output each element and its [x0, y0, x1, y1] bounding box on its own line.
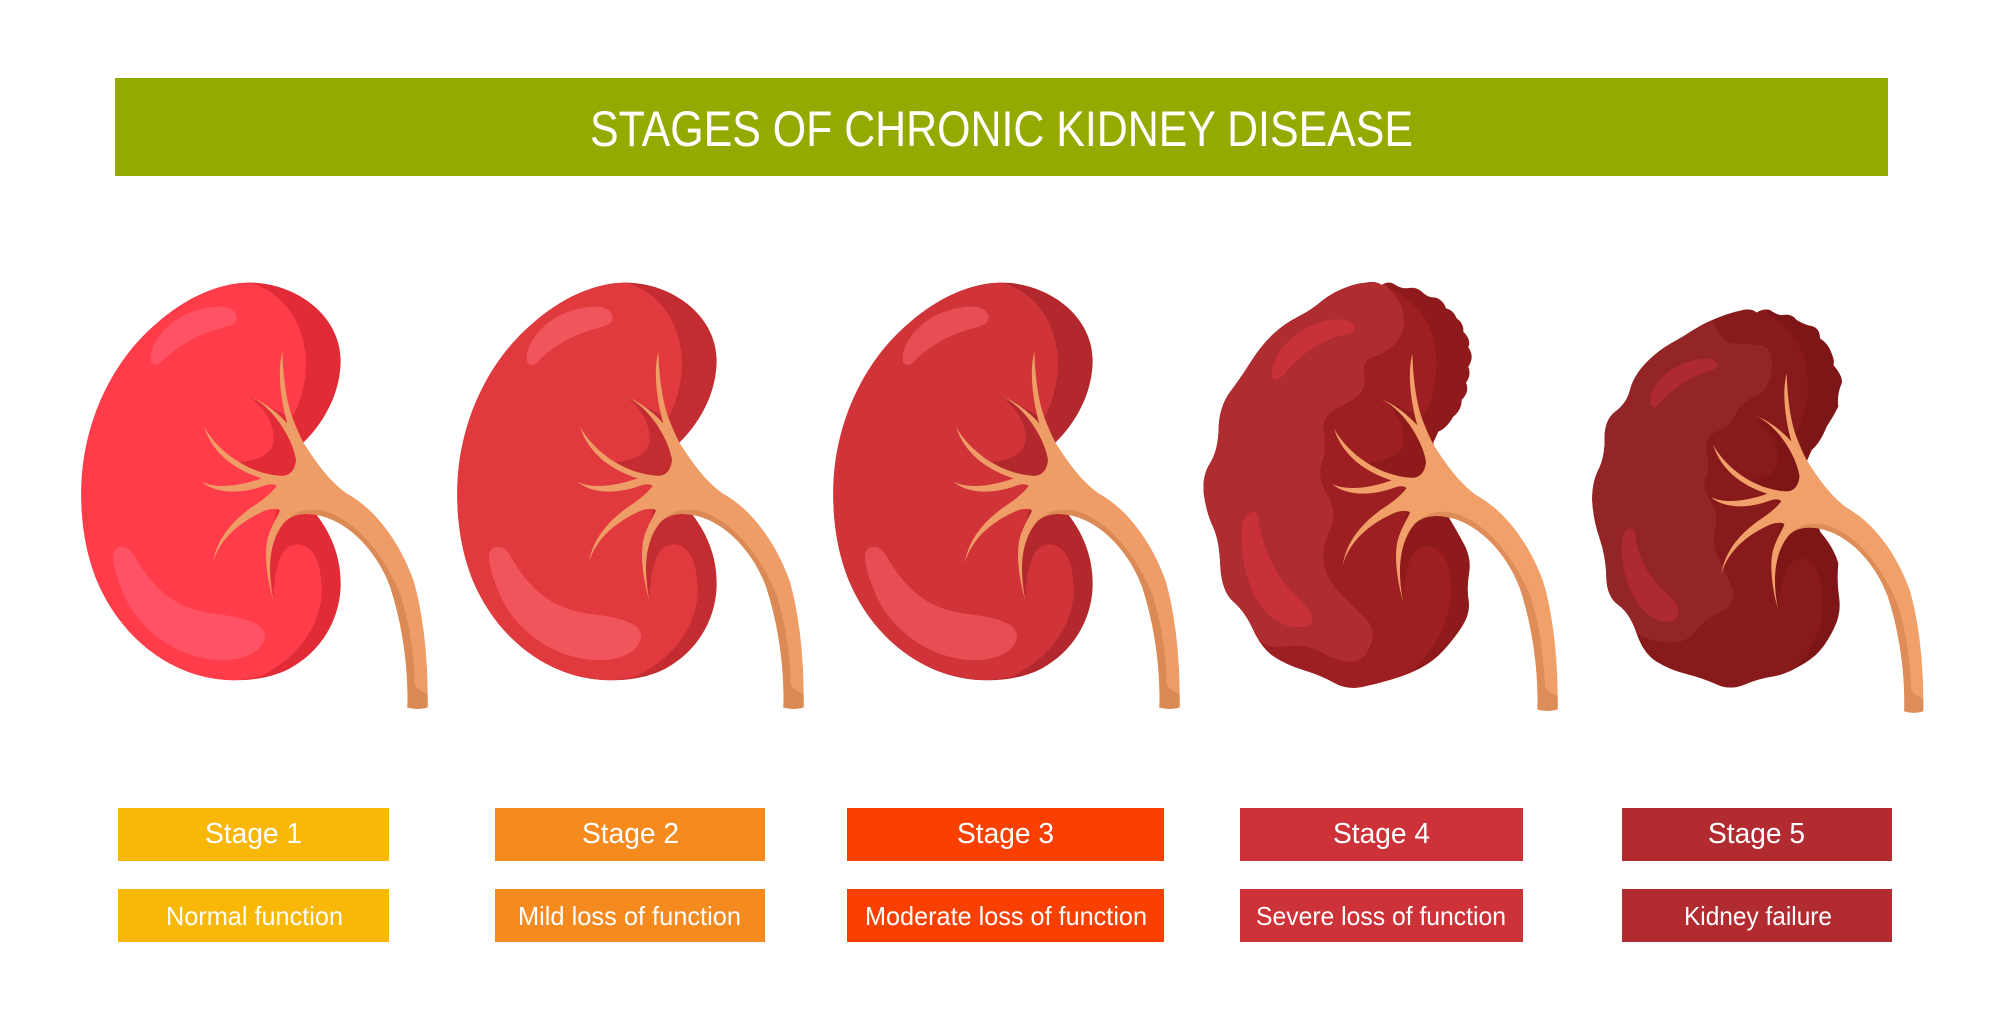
stage 3 description [847, 889, 1164, 942]
kidney illustration: stage 2 [457, 283, 804, 709]
stage 4 description: Severe loss of function [1256, 901, 1506, 931]
stage 4 label: Stage 4 [1333, 818, 1430, 850]
kidney illustration: stage 3 [833, 283, 1180, 709]
stage 5 description [1622, 889, 1892, 942]
kidney illustration: stage 5 [1592, 310, 1924, 713]
title banner [115, 78, 1888, 176]
stage 3 description: Moderate loss of function [865, 901, 1147, 931]
stage 5 description: Kidney failure [1684, 901, 1832, 931]
stage 5 label [1622, 808, 1892, 861]
stage 5 label: Stage 5 [1708, 818, 1805, 850]
stage 2 label: Stage 2 [582, 818, 679, 850]
stage 3 label: Stage 3 [957, 818, 1054, 850]
stage 2 label [495, 808, 765, 861]
stage 1 label: Stage 1 [205, 818, 302, 850]
kidney illustration: stage 4 [1204, 282, 1558, 711]
stage 3 label [847, 808, 1164, 861]
stage 2 description [495, 889, 765, 942]
kidney illustration: stage 1 [81, 283, 428, 709]
title text: STAGES OF CHRONIC KIDNEY DISEASE [590, 101, 1413, 157]
stage 2 description: Mild loss of function [518, 901, 741, 931]
stage 4 description [1240, 889, 1523, 942]
stage 1 label [118, 808, 389, 861]
stage 4 label [1240, 808, 1523, 861]
stage 1 description: Normal function [166, 901, 343, 931]
stage 1 description [118, 889, 389, 942]
